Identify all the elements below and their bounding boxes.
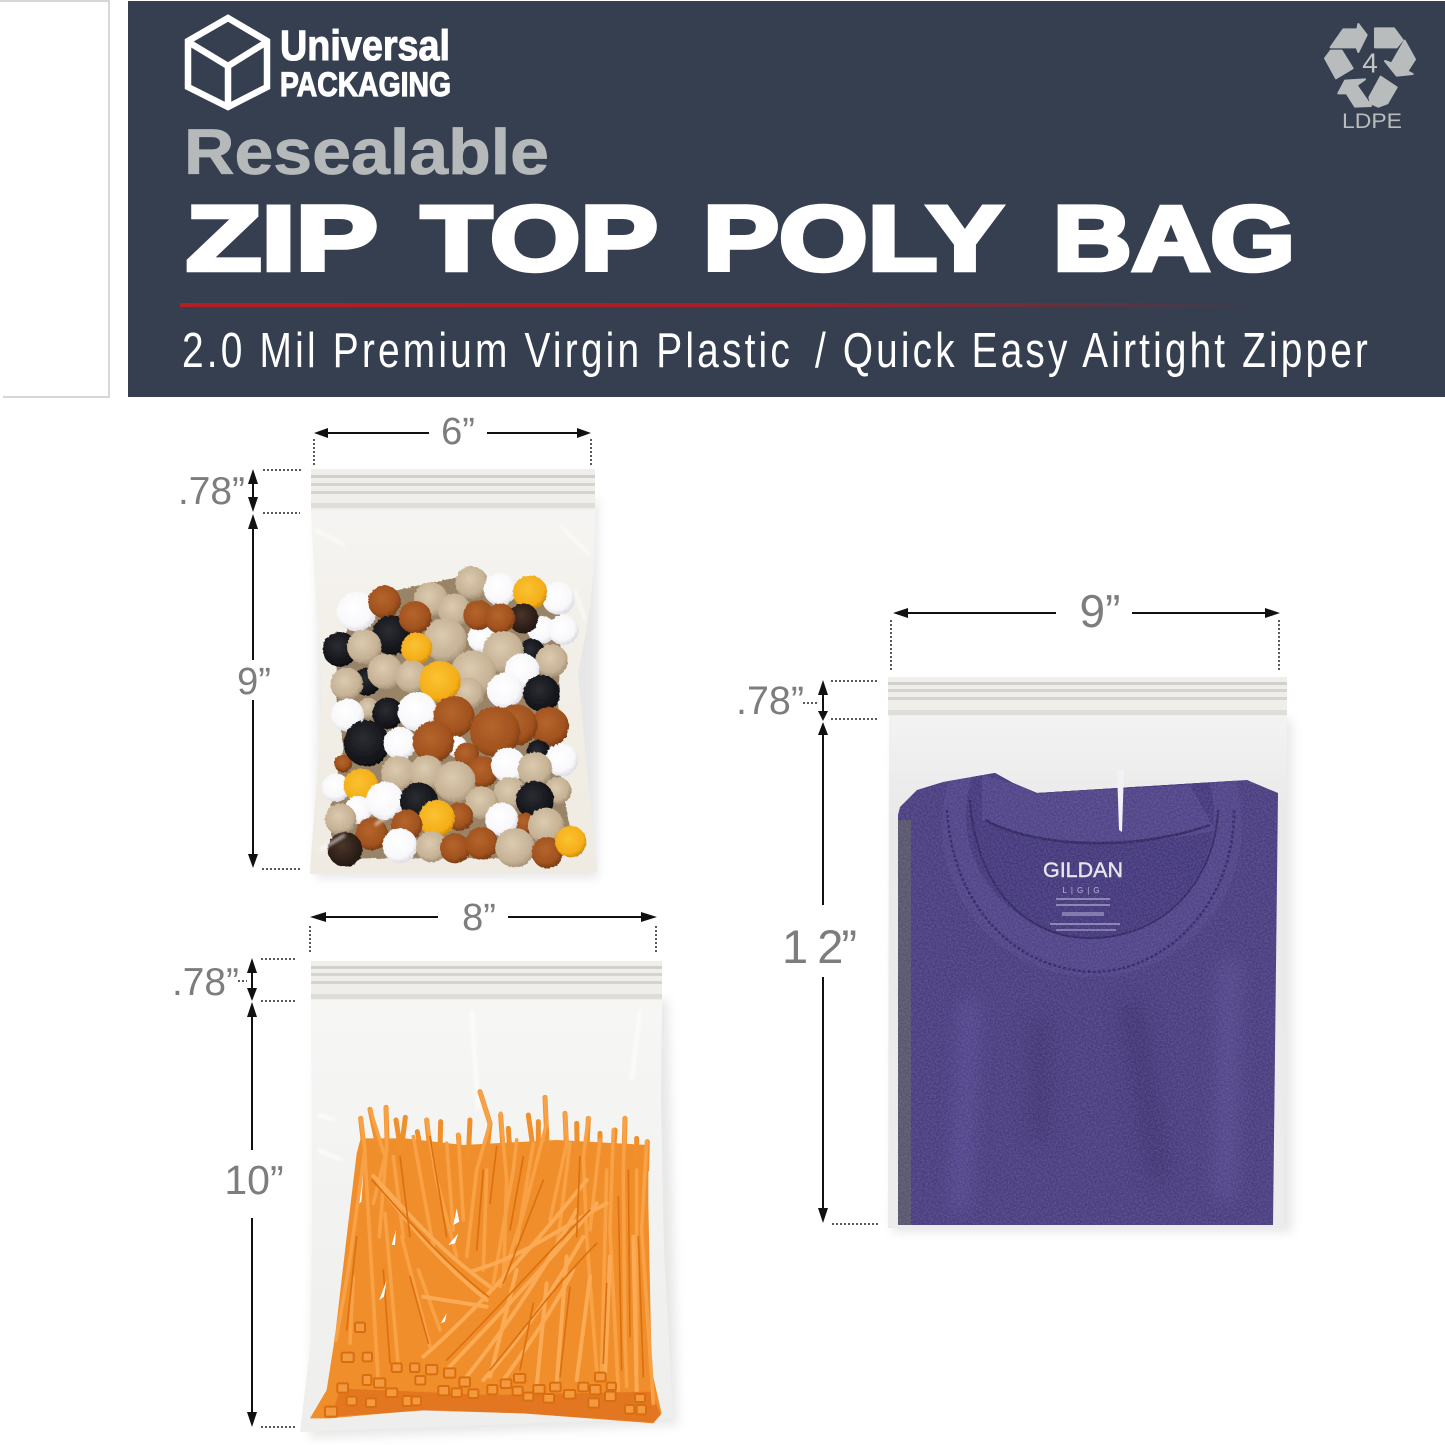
dimension: zipper .78 inches: .78” [178, 470, 245, 513]
icon: recycling LDPE 4: LDPE [1342, 110, 1402, 133]
dimension: zipper .78 inches [178, 469, 303, 513]
cable ties [310, 1092, 662, 1423]
bag 1 zipper [311, 469, 595, 510]
icon: recycling LDPE 4 [1325, 24, 1415, 133]
dimension: height 10 inches: 10” [224, 1157, 284, 1203]
shirt tag text: L|G|G [1062, 886, 1104, 895]
bag 2: orange cable ties [300, 961, 678, 1438]
white empty box at left of header [0, 1, 109, 397]
shirt tag text [1043, 859, 1123, 931]
subtitle [182, 324, 1371, 378]
bag 2 shadow [310, 1000, 678, 1438]
icon: recycling LDPE 4: 4 [1362, 47, 1378, 78]
dimension: zipper .78 inches: .78” [172, 961, 239, 1004]
dimension: height 12 inches [782, 722, 878, 1224]
dimension: width 9 inches [891, 585, 1280, 670]
shirt folds [960, 960, 1230, 1210]
dimension: width 6 inches: 6” [441, 411, 475, 453]
dimension: width 8 inches [310, 897, 657, 953]
subtitle: 2.0 Mil Premium Virgin Plastic [182, 324, 793, 378]
title: Zip Top Poly Bag: TOP [421, 188, 658, 290]
logo: Universal Packaging [188, 18, 451, 107]
dimension: width 8 inches: 8” [462, 897, 496, 939]
shirt neck opening [966, 773, 1214, 937]
title: Zip Top Poly Bag: ZIP [186, 188, 378, 290]
title: Zip Top Poly Bag: POLY [703, 188, 1003, 290]
red divider [180, 303, 1260, 307]
bag 3 zipper [888, 677, 1287, 716]
dimension: zipper .78 inches [172, 958, 297, 1004]
logo text: Universal: Universal [280, 22, 450, 70]
pom poms [324, 569, 584, 866]
bag 1: pom poms [310, 469, 598, 878]
dimension: zipper .78 inches: .78” [736, 679, 804, 723]
dimension: zipper .78 inches [736, 679, 879, 723]
header banner [128, 1, 1445, 397]
bag 1 body [310, 505, 597, 874]
heading: Resealable: Resealable [184, 116, 549, 188]
bag 2 body [300, 998, 673, 1432]
icon: box [188, 18, 267, 107]
dimensions: bag 2 [172, 897, 657, 1427]
logo text: Packaging: PACKAGING [280, 66, 451, 104]
bag 3 glare [1117, 770, 1124, 832]
dimension: height 9 inches [237, 514, 300, 869]
dimensions: bag 3 [736, 585, 1280, 1224]
bag 1 shadow [316, 500, 598, 878]
dimension: height 10 inches [224, 1002, 295, 1427]
bag 3: purple t-shirt [888, 673, 1292, 1232]
bag 3 shadow [892, 720, 1292, 1232]
title: Zip Top Poly Bag [186, 188, 1295, 290]
t-shirt [898, 773, 1278, 1225]
dimension: height 12 inches: 1 2” [782, 920, 857, 973]
bag 1 glare [315, 525, 590, 850]
bag 3 body [888, 714, 1287, 1228]
bag 2 zipper [311, 961, 662, 1000]
shirt tag text: GILDAN [1043, 859, 1123, 882]
dimension: width 9 inches: 9” [1080, 585, 1120, 637]
title: Zip Top Poly Bag: BAG [1053, 188, 1295, 290]
shirt collar [949, 773, 1236, 793]
dimension: width 6 inches [314, 411, 591, 465]
dimensions: bag 1 [178, 411, 591, 869]
bag 2 glare [318, 1010, 640, 1160]
dimension: height 9 inches: 9” [237, 661, 271, 703]
